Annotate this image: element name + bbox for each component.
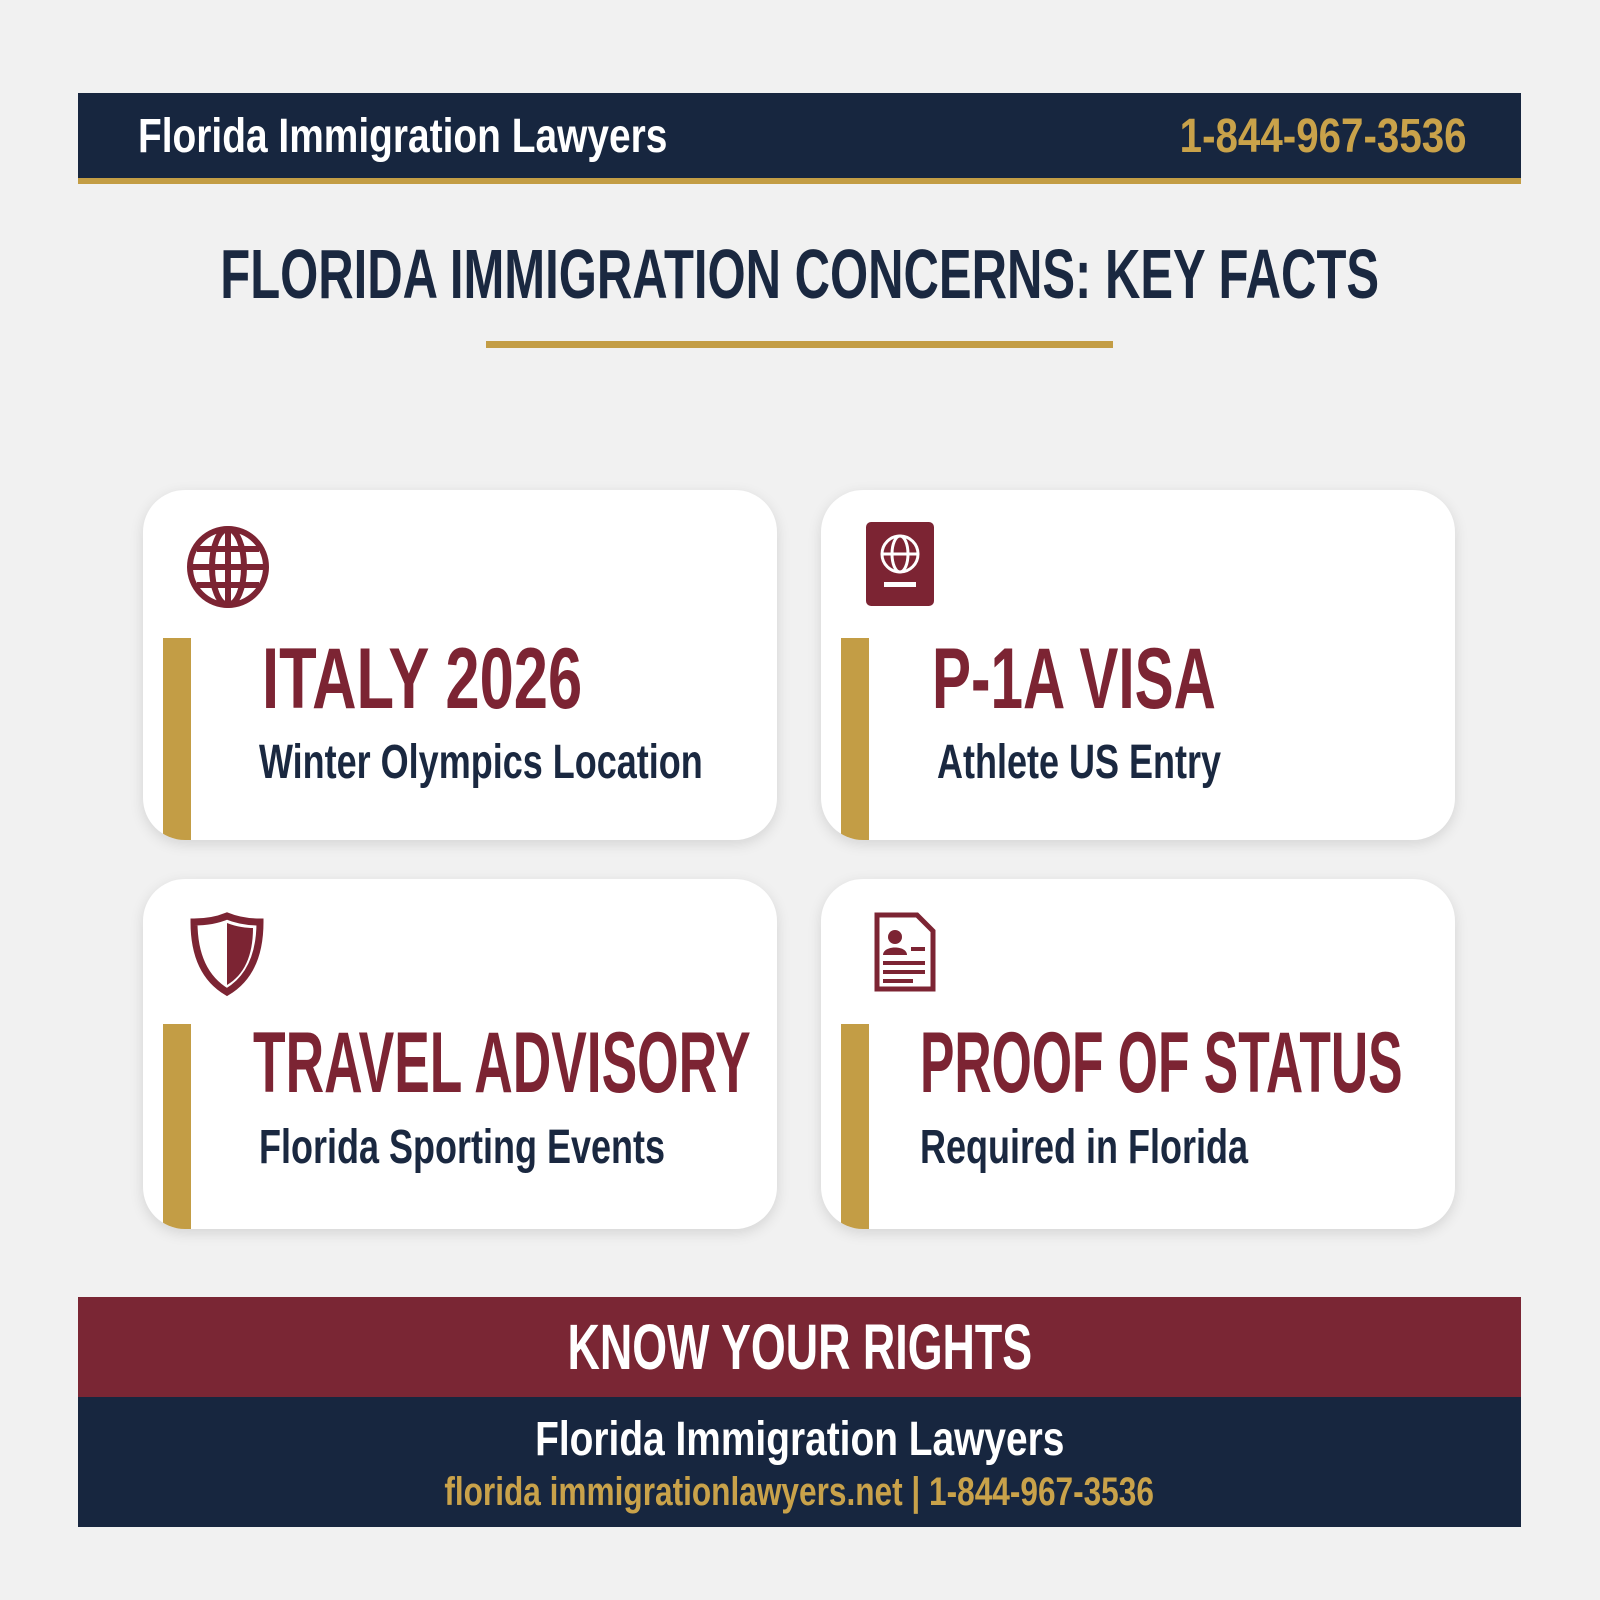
subtext: Required in Florida (920, 1121, 1248, 1174)
card: proof of status (821, 879, 1455, 1229)
card: Italy 2026 (143, 490, 777, 840)
heading: ITALY 2026 (262, 631, 582, 727)
card: travel advisory (143, 879, 777, 1229)
header bar (78, 93, 1521, 184)
footer contact: florida immigrationlawyers.net | 1-844-967-3536 (445, 1470, 1154, 1514)
header bar: Florida Immigration Lawyers (138, 110, 667, 163)
heading: P-1A VISA (932, 631, 1216, 727)
title: FLORIDA IMMIGRATION CONCERNS: KEY FACTS (221, 235, 1379, 313)
icon: globe (187, 526, 269, 608)
footer name: Florida Immigration Lawyers (535, 1413, 1064, 1466)
subtext: Athlete US Entry (937, 736, 1221, 789)
heading: TRAVEL ADVISORY (253, 1015, 751, 1111)
heading: PROOF OF STATUS (920, 1015, 1403, 1111)
icon: shield (190, 912, 264, 996)
subtext: Winter Olympics Location (259, 736, 703, 789)
icon: document (874, 912, 936, 992)
header bar: 1-844-967-3536 (1180, 110, 1467, 163)
title underline (486, 341, 1113, 348)
footer (78, 1397, 1521, 1527)
banner: know your rights (78, 1297, 1521, 1397)
card: P-1A visa (821, 490, 1455, 840)
icon: passport (866, 522, 934, 606)
subtext: Florida Sporting Events (259, 1121, 665, 1174)
banner: know your rights: KNOW YOUR RIGHTS (567, 1311, 1032, 1383)
